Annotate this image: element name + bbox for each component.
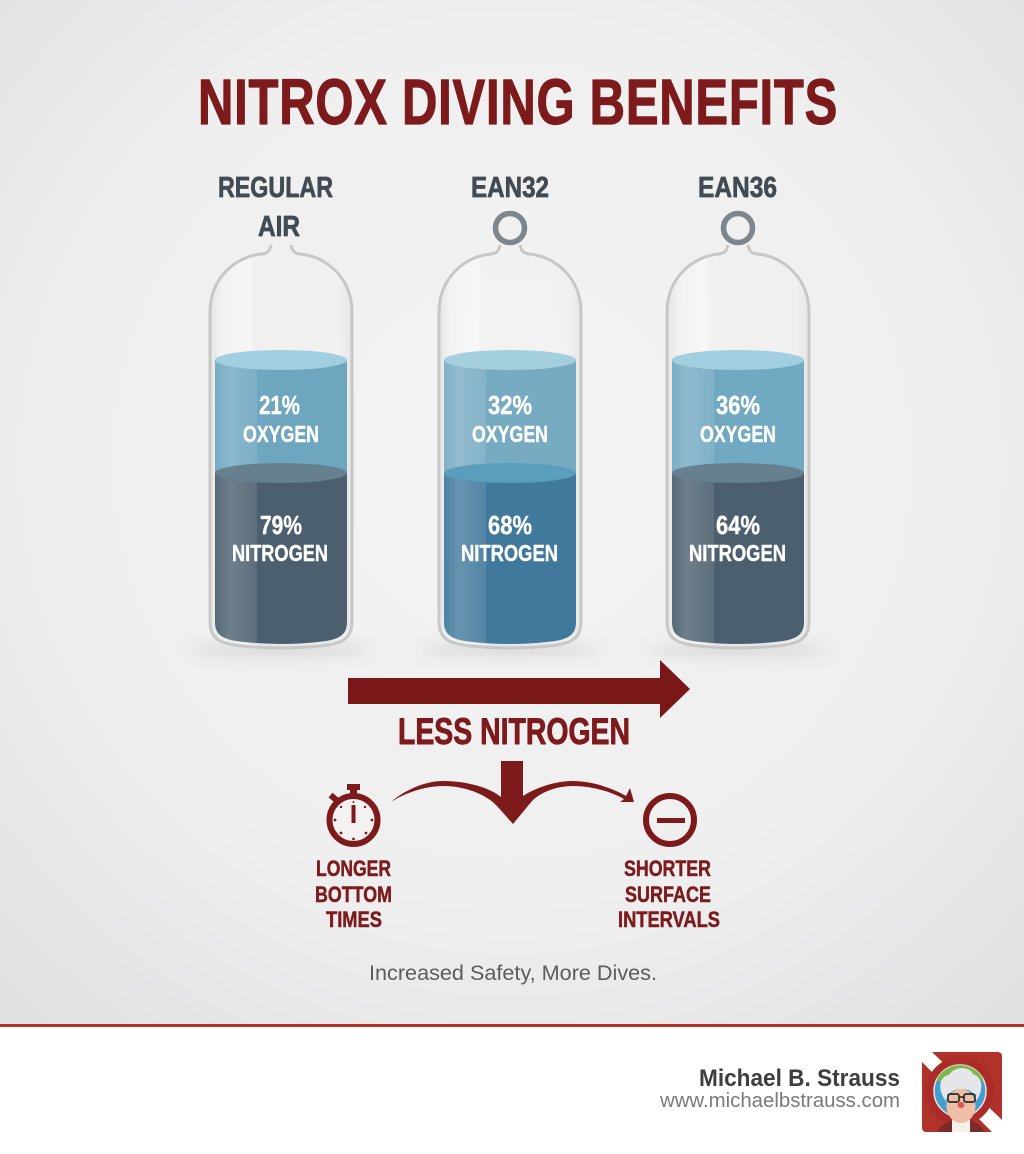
author name: Michael B. Strauss: [699, 1065, 900, 1092]
icon: stopwatch: [329, 784, 378, 844]
tank: EAN32: [418, 172, 602, 654]
tagline: Increased Safety, More Dives.: [369, 961, 657, 985]
tank floor shadow: [189, 646, 373, 654]
label: longer bottom times: [315, 856, 392, 932]
label: shorter surface intervals: SHORTER: [624, 856, 711, 881]
label: shorter surface intervals: [618, 856, 720, 932]
icon: minus circle: [646, 796, 694, 844]
glass cylinder: [667, 245, 809, 648]
nitrogen percentage: 79%: [260, 512, 302, 540]
heading: less nitrogen: LESS NITROGEN: [398, 710, 630, 752]
oxygen layer: [444, 350, 576, 474]
valve ring: [724, 214, 752, 242]
nitrogen layer: [672, 463, 804, 653]
tank label: EAN32: EAN32: [471, 172, 549, 204]
nitrogen percentage: 68%: [488, 512, 532, 540]
oxygen percentage: OXYGEN: [472, 421, 548, 447]
label: shorter surface intervals: INTERVALS: [618, 907, 720, 932]
tank: EAN36: [646, 172, 830, 654]
footer band: [0, 1027, 1024, 1154]
oxygen percentage: 21%: [259, 392, 300, 420]
arrow: less nitrogen direction: [348, 660, 690, 718]
tank label: regular air: AIR: [258, 211, 300, 243]
oxygen percentage: OXYGEN: [700, 421, 776, 447]
oxygen layer: [215, 350, 347, 474]
nitrogen percentage: 64%: [716, 512, 760, 540]
tank floor shadow: [646, 646, 830, 654]
footer accent line: [0, 1024, 1024, 1027]
oxygen percentage: OXYGEN: [243, 421, 319, 447]
label: longer bottom times: BOTTOM: [315, 882, 392, 907]
oxygen percentage: [243, 392, 319, 447]
label: longer bottom times: LONGER: [316, 856, 391, 881]
label: longer bottom times: TIMES: [326, 907, 382, 932]
glass cylinder: [210, 245, 352, 648]
tank label: EAN36: EAN36: [698, 172, 777, 204]
oxygen percentage: 32%: [488, 392, 532, 420]
label: shorter surface intervals: SURFACE: [625, 882, 711, 907]
title: NITROX DIVING BENEFITS: [198, 66, 838, 138]
nitrogen percentage: [689, 512, 786, 566]
oxygen percentage: [472, 392, 548, 447]
logo: author portrait badge: [922, 1052, 1002, 1132]
tank label: regular air: REGULAR: [218, 172, 333, 204]
valve ring: [496, 214, 524, 242]
nitrogen percentage: NITROGEN: [689, 540, 786, 566]
glass cylinder: [439, 245, 581, 648]
oxygen layer: [672, 350, 804, 474]
tank: regular air: [189, 172, 373, 654]
tank label: regular air: [218, 172, 333, 243]
oxygen percentage: 36%: [716, 392, 760, 420]
oxygen percentage: [700, 392, 776, 447]
nitrogen percentage: [461, 512, 558, 566]
arrow: branching down arrow: [391, 761, 634, 824]
nitrogen percentage: [232, 512, 328, 566]
tank floor shadow: [418, 646, 602, 654]
nitrogen layer: [215, 463, 347, 653]
nitrogen percentage: NITROGEN: [461, 540, 558, 566]
nitrogen percentage: NITROGEN: [232, 540, 328, 566]
author website: www.michaelbstrauss.com: [659, 1090, 900, 1112]
nitrogen layer: [444, 463, 576, 653]
